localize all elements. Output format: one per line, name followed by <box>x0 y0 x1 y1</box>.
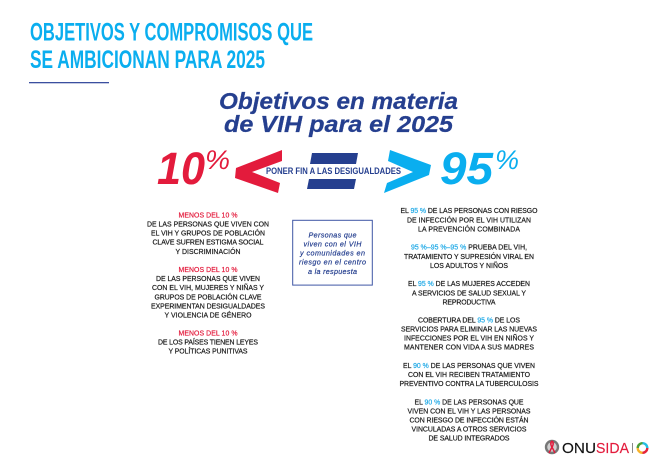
title underline rule <box>29 82 109 83</box>
left column: 10 percent targets <box>147 212 269 356</box>
target: sexual and reproductive health: REPRODUCTIVA <box>442 299 496 306</box>
target: stigma: DE LAS PERSONAS QUE VIVEN CON <box>147 222 269 229</box>
main heading: de VIH para el 2025 <box>224 111 454 137</box>
target: combination prevention: DE INFECCIÓN POR EL VIH UTILIZAN <box>407 215 531 224</box>
equals sign <box>307 153 358 189</box>
target: integrated services: DE SALUD INTEGRADOS <box>428 436 510 443</box>
centre callout box: a la respuesta <box>308 267 357 276</box>
target: punitive laws <box>158 331 258 356</box>
wordmark <box>562 440 630 457</box>
target: testing and treatment: TRATAMIENTO Y SUPRESIÓN VIRAL EN <box>404 252 534 261</box>
target: inequality and violence: CON EL VIH, MUJERES Y NIÑAS Y <box>152 283 264 292</box>
target: punitive laws: Y POLÍTICAS PUNITIVAS <box>168 347 248 356</box>
target: integrated services: CON RIESGO DE INFECCIÓN ESTÁN <box>410 415 529 424</box>
target: inequality and violence: MENOS DEL 10 % <box>178 267 238 274</box>
target: testing and treatment: 95 %–95 %–95 % PRUEBA DEL VIH, <box>411 245 527 252</box>
target: sexual and reproductive health: EL 95 % DE LAS MUJERES ACCEDEN <box>408 281 530 288</box>
greater-than sign <box>384 150 431 193</box>
target: vertical transmission: SERVICIOS PARA ELIMINAR LAS NUEVAS <box>401 327 537 334</box>
target: stigma: Y DISCRIMINACIÓN <box>176 247 241 256</box>
target: combination prevention <box>400 208 538 234</box>
95 percent figure <box>440 143 519 194</box>
target: inequality and violence: GRUPOS DE POBLACIÓN CLAVE <box>154 292 262 301</box>
icon: SDG colour wheel <box>638 443 647 453</box>
divider <box>631 443 634 453</box>
target: testing and treatment <box>404 245 534 270</box>
target: stigma: EL VIH Y GRUPOS DE POBLACIÓN <box>151 229 265 238</box>
target: inequality and violence: Y VIOLENCIA DE GÉNERO <box>164 311 252 320</box>
target: tuberculosis <box>400 363 539 388</box>
logo: ONUSIDA <box>545 440 647 457</box>
title: SE AMBICIONAN PARA 2025 <box>30 46 265 74</box>
target: punitive laws: MENOS DEL 10 % <box>178 331 238 338</box>
target: sexual and reproductive health: A SERVICIOS DE SALUD SEXUAL Y <box>412 290 526 297</box>
centre callout box: riesgo en el centro <box>299 258 366 267</box>
target: inequality and violence: DE LAS PERSONAS QUE VIVEN <box>156 276 260 283</box>
wordmark: ONU <box>562 440 596 457</box>
10 percent figure <box>157 143 230 194</box>
less-than sign <box>235 150 282 193</box>
centre callout box: viven con el VIH <box>304 239 362 248</box>
target: combination prevention: EL 95 % DE LAS PERSONAS CON RIESGO <box>400 208 538 215</box>
main heading <box>219 88 458 137</box>
centre callout box <box>293 220 372 285</box>
target: stigma <box>147 212 269 256</box>
target: stigma: MENOS DEL 10 % <box>178 212 238 219</box>
icon: UN emblem with red ribbon <box>545 440 559 454</box>
target: sexual and reproductive health <box>408 281 530 306</box>
target: vertical transmission: INFECCIONES POR EL VIH EN NIÑOS Y <box>404 334 534 343</box>
10 percent figure: % <box>205 145 230 175</box>
target: stigma: CLAVE SUFREN ESTIGMA SOCIAL <box>152 240 264 247</box>
target: testing and treatment: LOS ADULTOS Y NIÑOS <box>430 261 508 270</box>
target: tuberculosis: CON EL VIH RECIBEN TRATAMIENTO <box>408 372 531 379</box>
target: vertical transmission <box>401 317 537 352</box>
main heading: Objetivos en materia <box>219 88 458 114</box>
equation banner <box>157 143 519 194</box>
target: combination prevention: LA PREVENCIÓN COMBINADA <box>418 225 520 234</box>
title: OBJETIVOS Y COMPROMISOS QUE <box>30 18 313 46</box>
target: integrated services: VIVEN CON EL VIH Y LAS PERSONAS <box>408 408 531 415</box>
target: integrated services: EL 90 % DE LAS PERSONAS QUE <box>414 399 524 406</box>
centre callout box: Personas que <box>308 230 356 239</box>
10 percent figure: 10 <box>157 143 205 194</box>
target: tuberculosis: EL 90 % DE LAS PERSONAS QUE VIVEN <box>403 363 535 370</box>
banner text: PONER FIN A LAS DESIGUALDADES <box>266 166 401 176</box>
target: inequality and violence: EXPERIMENTAN DESIGUALDADES <box>151 303 265 310</box>
wordmark: SIDA <box>596 440 630 457</box>
target: vertical transmission: MANTENER CON VIDA A SUS MADRES <box>404 345 534 352</box>
95 percent figure: % <box>495 145 519 175</box>
centre callout box: y comunidades en <box>299 249 365 258</box>
target: punitive laws: DE LOS PAÍSES TIENEN LEYES <box>158 338 258 347</box>
target: integrated services: VINCULADAS A OTROS SERVICIOS <box>412 426 527 433</box>
target: vertical transmission: COBERTURA DEL 95 % DE LOS <box>418 317 520 324</box>
right column: 95 percent targets <box>400 208 539 443</box>
target: integrated services <box>408 399 531 443</box>
target: inequality and violence <box>151 267 265 320</box>
95 percent figure: 95 <box>440 143 494 194</box>
title <box>30 18 313 74</box>
target: tuberculosis: PREVENTIVO CONTRA LA TUBERCULOSIS <box>400 381 539 388</box>
